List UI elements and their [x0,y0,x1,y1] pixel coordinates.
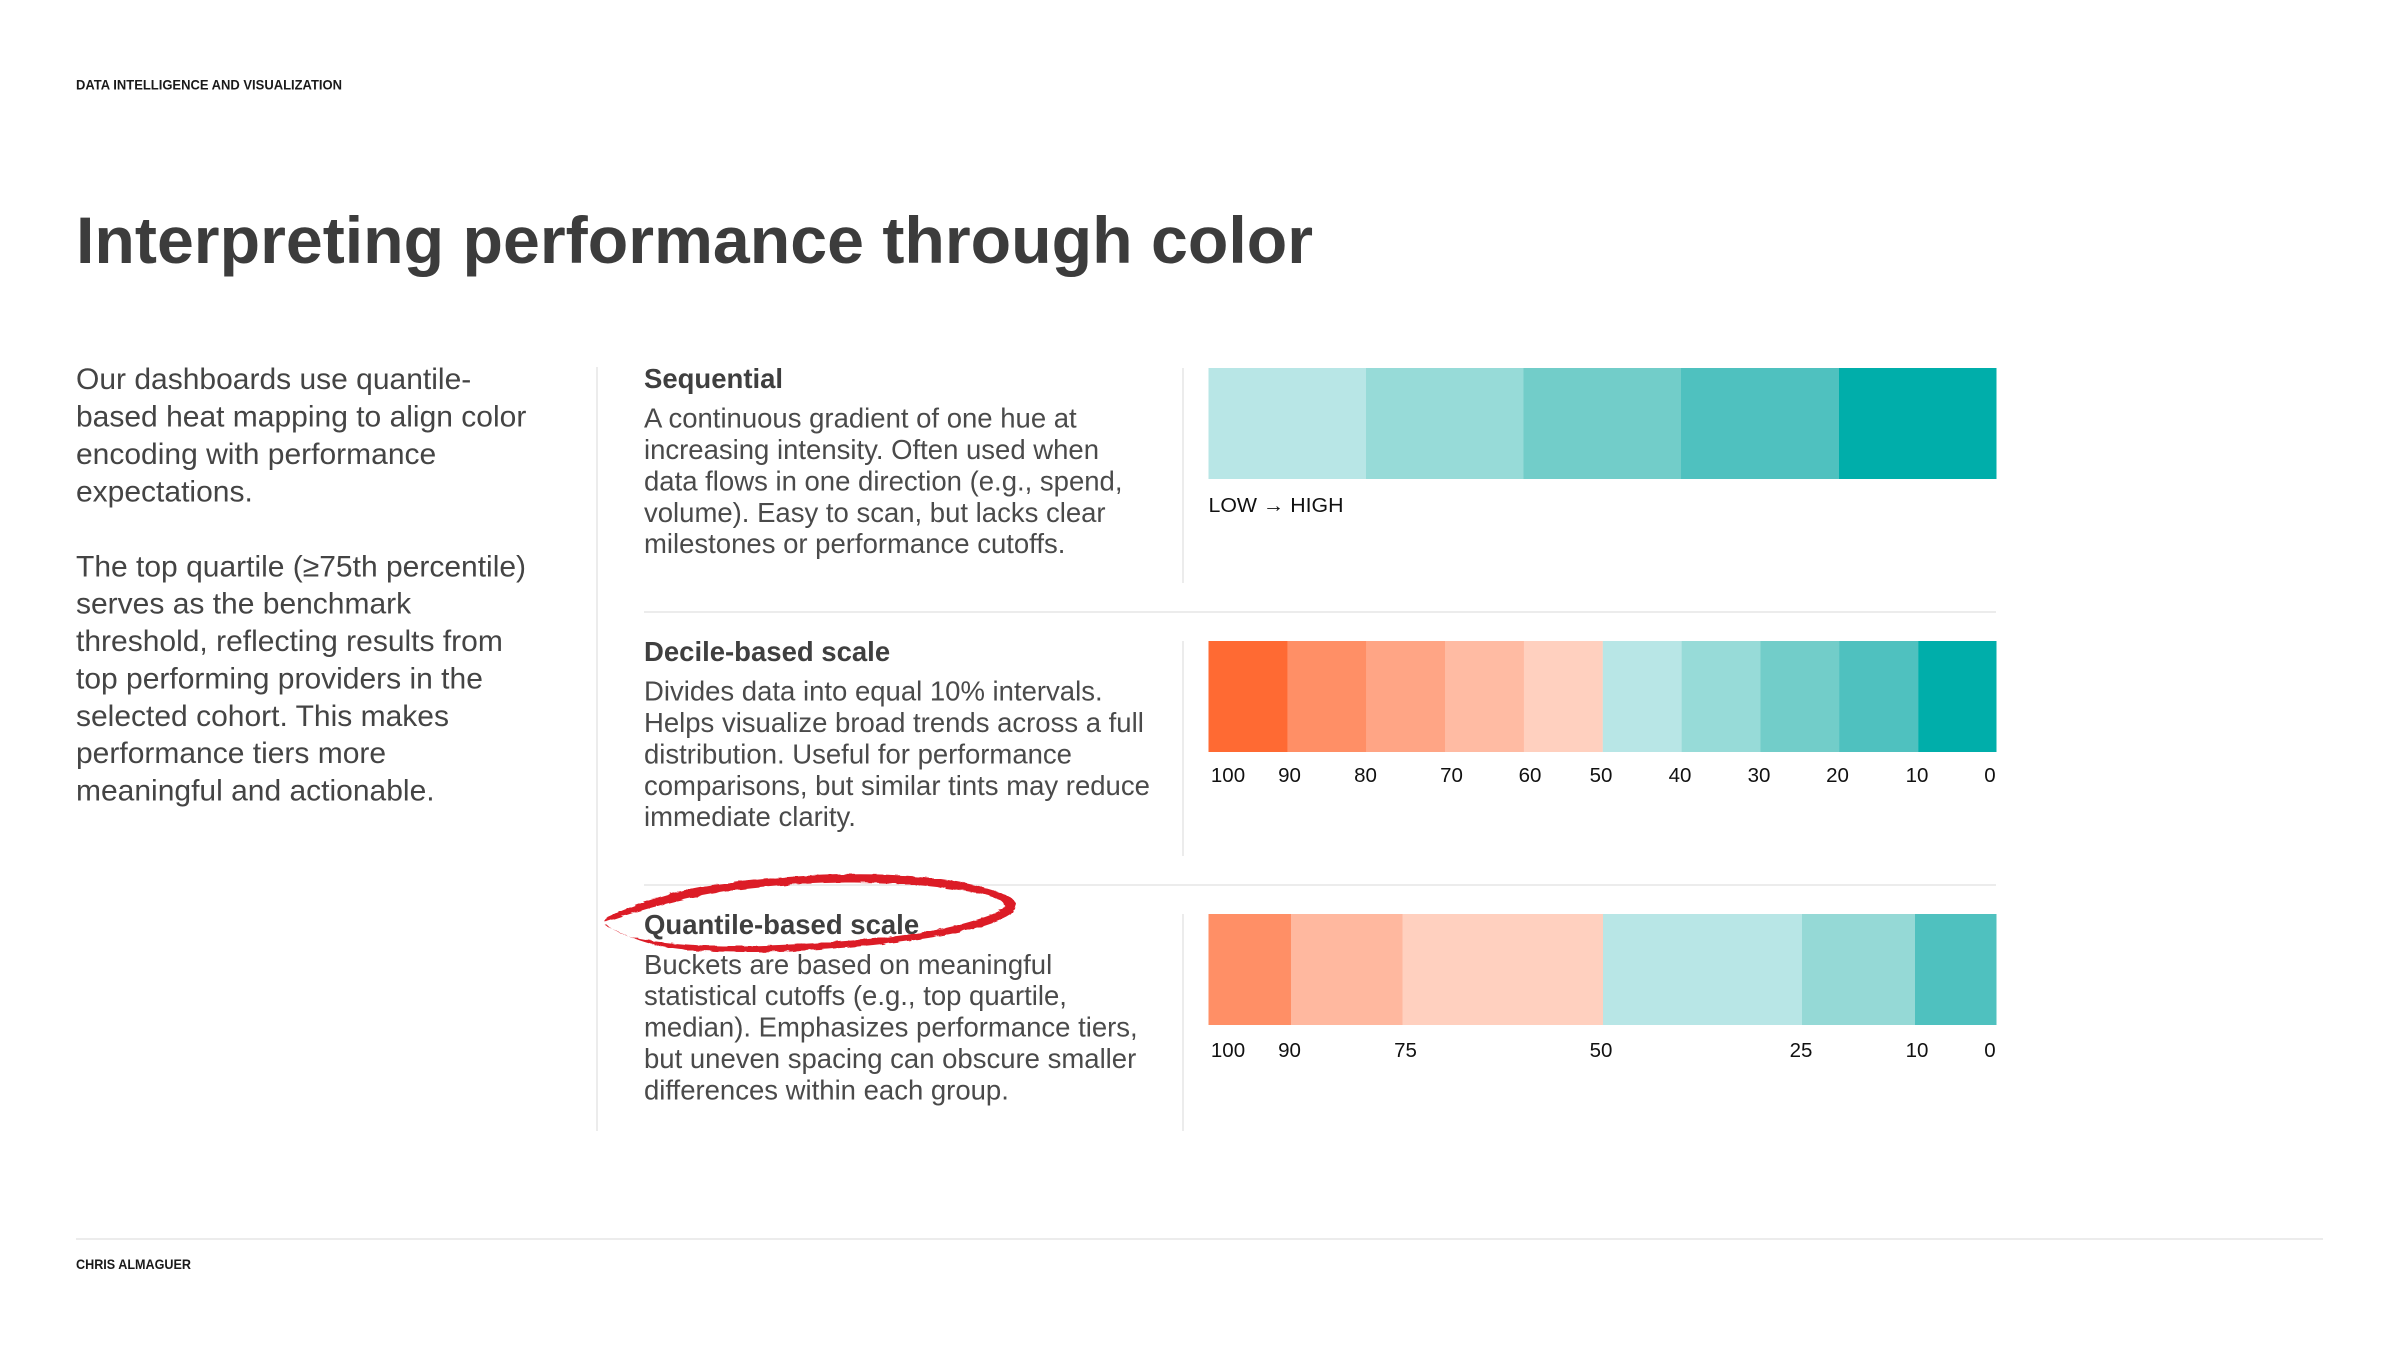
heading: decile: Decile-based scale [644,636,890,667]
decile axis labels: 100 [1211,764,1245,787]
decile axis labels: 60 [1519,764,1541,787]
decile axis labels: 0 [1984,764,1996,787]
quantile axis labels: 25 [1790,1039,1812,1062]
decile axis labels: 90 [1278,764,1301,787]
description: quantile [644,949,1138,1106]
quantile color bar [1208,914,1996,1025]
decile color bar [1208,641,1996,752]
sequential color bar [1208,368,1996,479]
panel: intro text: meaningful and actionable. [76,774,435,808]
description: quantile: median). Emphasizes performance tiers, [644,1012,1138,1042]
heading: quantile: Quantile-based scale [644,909,919,940]
quantile axis labels: 0 [1984,1039,1996,1062]
panel: quantile-based scale [644,909,1996,1131]
description: sequential [644,402,1122,559]
decile axis labels: 40 [1669,764,1691,787]
panel: intro text: threshold, reflecting results from [76,625,503,658]
panel: intro text: serves as the benchmark [76,588,412,620]
decile axis labels: 10 [1906,764,1928,787]
callout: red hand-drawn ellipse [605,874,1016,952]
description: sequential: increasing intensity. Often used when [644,434,1099,465]
panel: intro text: selected cohort. This makes [76,700,449,733]
panel: sequential [644,363,1996,583]
description: decile: Divides data into equal 10% intervals. [644,676,1103,706]
description: decile: comparisons, but similar tints may reduce [644,770,1150,801]
panel: decile-based scale [644,636,1996,856]
description: decile [644,676,1150,832]
low to high label: LOW → HIGH [1208,494,1344,517]
description: sequential: milestones or performance cutoffs. [644,528,1065,559]
description: sequential: A continuous gradient of one hue at [644,402,1077,434]
footer: author: CHRIS ALMAGUER [76,1256,191,1272]
quantile axis labels: 10 [1906,1039,1928,1062]
description: quantile: differences within each group. [644,1074,1009,1106]
panel: intro text: The top quartile (≥75th percentile) [76,550,526,584]
description: decile: Helps visualize broad trends across a full [644,707,1144,738]
description: quantile: Buckets are based on meaningful [644,949,1052,980]
panel: intro text: Our dashboards use quantile- [76,363,471,396]
quantile axis labels: 50 [1590,1039,1612,1062]
description: decile: distribution. Useful for performance [644,738,1072,770]
description: sequential: data flows in one direction (e.g., spend, [644,466,1122,496]
decile axis labels: 70 [1440,764,1463,787]
decile axis labels: 50 [1590,764,1612,787]
panel: intro text: encoding with performance [76,438,436,471]
panel: intro text: expectations. [76,476,253,508]
panel: intro text: based heat mapping to align color [76,400,526,434]
description: quantile: statistical cutoffs (e.g., top quartile, [644,980,1067,1011]
description: quantile: but uneven spacing can obscure smaller [644,1043,1136,1074]
quantile axis labels: 75 [1394,1039,1417,1062]
panel: intro text [76,363,526,808]
description: sequential: volume). Easy to scan, but lacks clear [644,497,1106,528]
decile axis labels [1211,764,1996,787]
panel: intro text: performance tiers more [76,737,386,770]
eyebrow label: DATA INTELLIGENCE AND VISUALIZATION [76,76,342,92]
quantile axis labels: 90 [1278,1039,1301,1062]
heading: sequential: Sequential [644,363,783,394]
decile axis labels: 80 [1354,764,1377,787]
panel: intro text: top performing providers in the [76,662,483,696]
description: decile: immediate clarity. [644,801,856,832]
quantile axis labels: 100 [1211,1039,1245,1062]
title: Interpreting performance through color [76,203,1313,277]
decile axis labels: 20 [1826,764,1849,787]
decile axis labels: 30 [1748,764,1770,787]
quantile axis labels [1211,1039,1996,1062]
